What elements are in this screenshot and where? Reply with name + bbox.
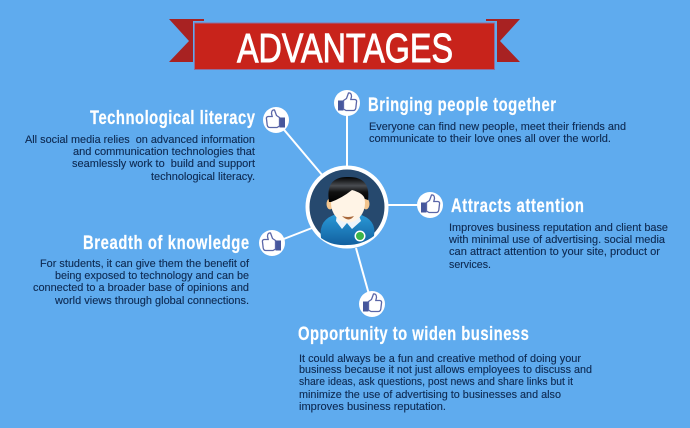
body text: and communication technologies that	[73, 146, 255, 158]
icon: thumb bringing people together	[334, 90, 360, 116]
section: opportunity to widen business	[298, 323, 592, 413]
section: attracts attention	[448, 195, 668, 271]
body text: share ideas, ask questions, post news and share links but it	[299, 376, 573, 388]
left ribbon tail	[169, 19, 204, 62]
heading: Technological literacy	[90, 107, 255, 128]
body text	[299, 353, 592, 413]
icon: thumb attracts attention	[417, 192, 443, 218]
avatar hair	[328, 177, 368, 202]
title: ADVANTAGES	[237, 25, 453, 71]
body text: For students, it can give them the benefit of	[40, 258, 250, 270]
right ribbon tail	[486, 19, 520, 62]
body text: improves business reputation.	[299, 401, 446, 413]
body text: business because it not just allows employees to discuss and	[299, 364, 592, 376]
body text: Improves business reputation and client base	[449, 222, 668, 234]
body text: seamlessly work to build and support	[72, 158, 255, 170]
avatar face	[331, 184, 365, 222]
heading: Bringing people together	[368, 94, 556, 115]
body text: can attract attention to your site, product or	[449, 246, 660, 258]
icon: thumb breadth of knowledge	[259, 230, 285, 256]
avatar mouth	[342, 216, 354, 220]
body text: All social media relies on advanced information	[25, 134, 255, 146]
body text: being exposed to technology and can be	[55, 270, 249, 282]
body text: minimize the use of advertising to businesses and also	[299, 389, 561, 401]
section: breadth of knowledge	[33, 232, 250, 307]
avatar body	[321, 214, 374, 245]
body text: technological literacy.	[151, 171, 255, 183]
avatar ears	[326, 198, 334, 210]
avatar collar	[336, 213, 361, 229]
body text	[448, 222, 668, 271]
body text: connected to a broader base of opinions and	[33, 282, 249, 294]
body text: It could always be a fun and creative method of doing your	[299, 353, 581, 365]
body text: services.	[449, 259, 491, 271]
section: bringing people together	[368, 94, 626, 145]
icon: thumb opportunity to widen business	[359, 291, 385, 317]
section: technological literacy	[25, 107, 255, 183]
body text: Everyone can find new people, meet their friends and	[369, 121, 626, 133]
avatar badge	[354, 230, 366, 242]
heading: Breadth of knowledge	[83, 232, 249, 253]
heading: Opportunity to widen business	[298, 323, 529, 344]
body text: world views through global connections.	[54, 295, 249, 307]
body text: with minimal use of advertising. social media	[448, 234, 665, 246]
body text	[25, 134, 255, 183]
body text: communicate to their love ones all over the world.	[369, 133, 611, 145]
body text	[33, 258, 250, 307]
central avatar	[306, 166, 388, 248]
icon: thumb technological literacy	[263, 107, 289, 133]
title banner	[169, 19, 520, 71]
heading: Attracts attention	[451, 195, 584, 216]
body text	[369, 121, 626, 145]
connector lines	[276, 110, 425, 298]
